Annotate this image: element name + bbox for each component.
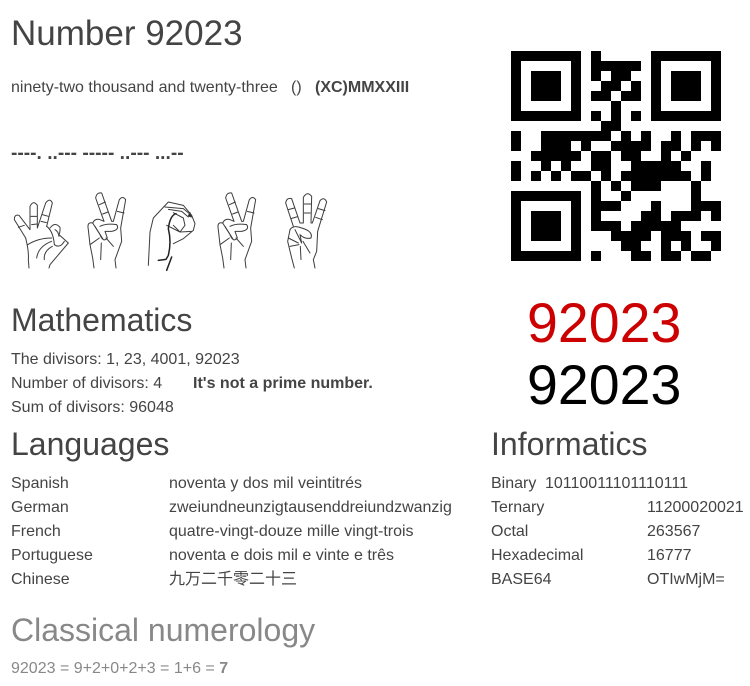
informatics table: BASE64 <box>491 571 551 588</box>
numerology sum: 92023 = 9+2+0+2+3 = 1+6 = 7 <box>11 660 228 677</box>
divisors: The divisors: 1, 23, 4001, 92023 <box>11 351 240 368</box>
number of divisors: Number of divisors: 4 <box>11 375 162 392</box>
informatics table <box>491 475 744 588</box>
prime note: It's not a prime number. <box>193 375 373 392</box>
languages table <box>11 475 452 588</box>
languages table: quatre-vingt-douze mille vingt-trois <box>169 523 414 540</box>
languages table: Portuguese <box>11 547 93 564</box>
languages table: German <box>11 499 69 516</box>
languages table: noventa e dois mil e vinte e três <box>169 547 394 564</box>
informatics table: 10110011101110111 <box>545 475 688 492</box>
informatics table: 16777 <box>647 547 692 564</box>
informatics table: Hexadecimal <box>491 547 583 564</box>
number name in words and roman numeral: (XC)MMXXIII <box>315 79 409 96</box>
mathematics facts <box>11 351 373 416</box>
icon: hand nine <box>14 200 68 268</box>
informatics table: 11200020021 <box>647 499 744 516</box>
icon: sign language hands <box>14 192 328 272</box>
heading: informatics: Informatics <box>491 426 647 462</box>
number name in words and roman numeral: ninety-two thousand and twenty-three <box>11 79 278 96</box>
informatics table: Binary <box>491 475 536 492</box>
languages table: Spanish <box>11 475 69 492</box>
icon: hand zero <box>148 202 195 270</box>
number name in words and roman numeral: () <box>291 79 302 96</box>
title: Number 92023 <box>11 14 243 53</box>
icon: hand two <box>88 193 126 268</box>
icon: hand two again <box>218 193 256 268</box>
informatics table: 263567 <box>647 523 700 540</box>
languages table: noventa y dos mil veintitrés <box>169 475 362 492</box>
languages table: Chinese <box>11 571 70 588</box>
languages table: zweiundneunzigtausenddreiundzwanzig <box>169 499 452 516</box>
heading: mathematics: Mathematics <box>11 302 192 338</box>
heading: languages: Languages <box>11 426 169 462</box>
morse code: ----. ..--- ----- ..--- ...-- <box>11 143 184 164</box>
informatics table: OTIwMjM= <box>647 571 725 588</box>
languages table: 九万二千零二十三 <box>169 571 297 588</box>
informatics table: Ternary <box>491 499 544 516</box>
large black number: 92023 <box>527 354 681 416</box>
icon: hand three <box>286 194 327 268</box>
heading: classical numerology: Classical numerology <box>11 612 315 648</box>
informatics table: Octal <box>491 523 528 540</box>
languages table: French <box>11 523 61 540</box>
icon: QR code <box>511 51 721 261</box>
large red number: 92023 <box>527 292 681 354</box>
sum of divisors: Sum of divisors: 96048 <box>11 399 174 416</box>
number name in words and roman numeral <box>11 79 409 96</box>
